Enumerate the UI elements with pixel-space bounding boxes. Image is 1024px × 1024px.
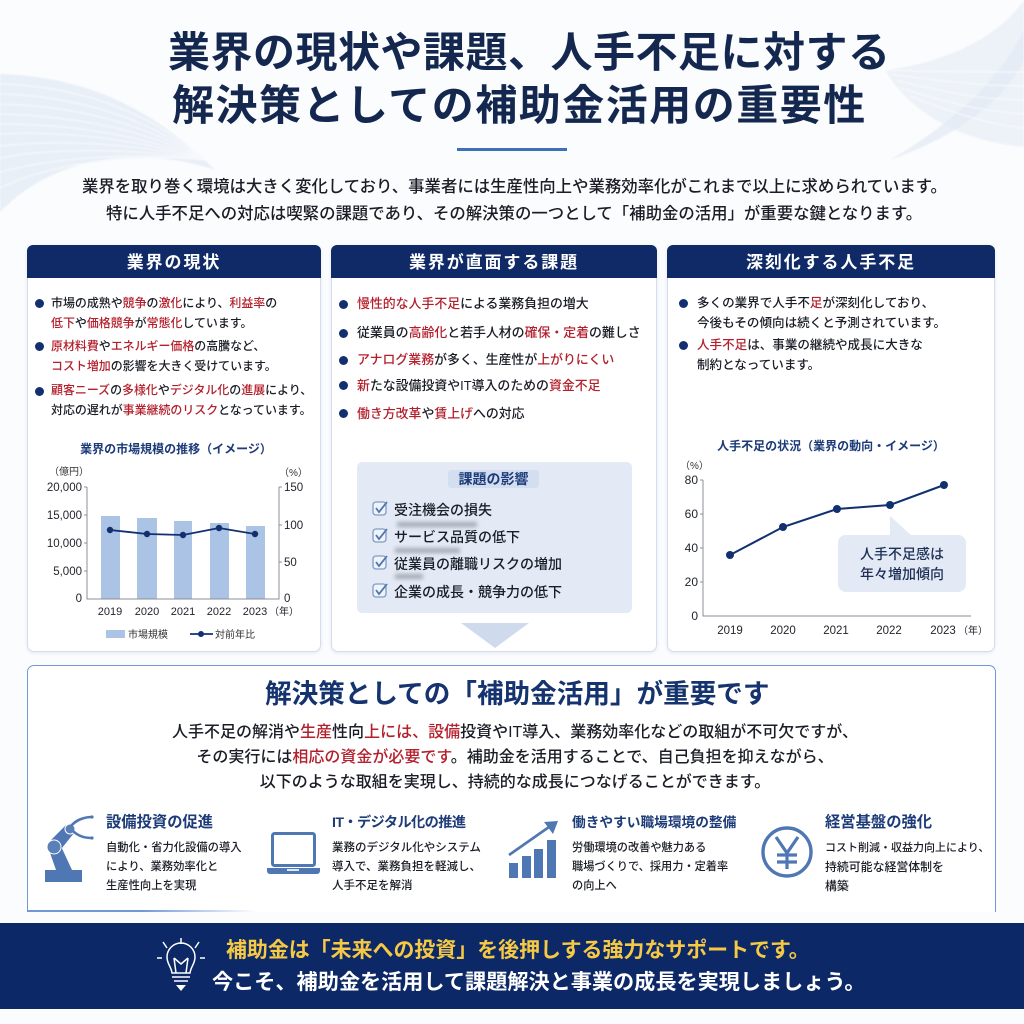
item text: コスト削減・収益力向上により、 xyxy=(825,842,989,854)
bullets: 深刻化する人手不足 xyxy=(679,296,946,372)
panel heading: 深刻化する人手不足 xyxy=(667,245,995,278)
item text: 持続可能な経営体制を xyxy=(825,860,944,874)
chart callout: 年々増加傾向 xyxy=(860,566,944,582)
solution text: 以下のような取組を実現し、持続的な成長につなげることができます。 xyxy=(260,774,770,791)
panel: 解決策 xyxy=(27,665,996,912)
bullets: 業界が直面する課題: 新たな設備投資やIT導入のための資金不足 xyxy=(357,378,600,393)
line chart: 人手不足の状況: 80 xyxy=(685,473,698,487)
checklist: 従業員の離職リスクの増加 xyxy=(394,556,562,572)
bar chart: 市場規模の推移: 15,000 xyxy=(47,510,82,522)
icon: light bulb xyxy=(157,938,205,991)
callout heading xyxy=(448,470,539,488)
item text: 職場づくりで、採用力・定着率 xyxy=(572,861,728,873)
arrow: down triangle xyxy=(461,623,529,648)
checklist: サービス品質の低下 xyxy=(394,529,520,545)
item: 働きやすい職場環境の整備 xyxy=(508,815,736,892)
bullets: 深刻化する人手不足: 今後もその傾向は続くと予測されています。 xyxy=(697,316,946,330)
item text: 導入で、業務負担を軽減し、 xyxy=(332,861,481,873)
chart callout: 人手不足感は xyxy=(860,546,944,562)
item text: 自動化・省力化設備の導入 xyxy=(106,842,242,854)
bar chart: 市場規模の推移: （億円） xyxy=(49,465,89,478)
bullets: 業界の現状: 低下や価格競争が常態化しています。 xyxy=(51,316,252,330)
item: IT・デジタル化の推進 xyxy=(267,814,481,892)
callout box: 課題の影響 xyxy=(357,462,632,613)
panel: 業界の現状 xyxy=(27,245,321,652)
item text xyxy=(825,814,989,893)
line chart: 人手不足の状況: （%） xyxy=(680,460,709,472)
item text: 生産性向上を実現 xyxy=(106,880,196,892)
panel: 深刻化する人手不足 xyxy=(667,245,995,652)
title: 業界の現状や課題、人手不足に対する xyxy=(168,29,891,76)
intro text: 業界を取り巻く環境は大きく変化しており、事業者には生産性向上や業務効率化がこれまで以上に求められています。 xyxy=(82,178,947,196)
bullets: 業界が直面する課題: 働き方改革や賃上げへの対応 xyxy=(357,406,525,421)
bullets: 深刻化する人手不足: 制約となっています。 xyxy=(697,358,820,372)
line chart: 人手不足の状況: 2022 xyxy=(876,625,902,637)
bar chart: 市場規模の推移: 10,000 xyxy=(47,538,82,550)
panel: 業界が直面する課題 xyxy=(331,245,657,652)
solution text: その実行には相応の資金が必要です。補助金を活用することで、自己負担を抑えながら、 xyxy=(196,749,834,766)
panel heading: 業界の現状: 業界の現状 xyxy=(127,253,221,272)
intro text xyxy=(82,178,947,223)
bullets: 業界が直面する課題: アナログ業務が多く、生産性が上がりにくい xyxy=(357,352,614,367)
bar chart: 市場規模の推移: 2021 xyxy=(171,606,195,618)
bullets: 業界が直面する課題: 従業員の高齢化と若手人材の確保・定着の難しさ xyxy=(357,325,641,340)
panel heading: 業界が直面する課題: 業界が直面する課題 xyxy=(409,253,579,272)
bullets: 業界が直面する課題 xyxy=(339,296,641,421)
chart legend: 対前年比 xyxy=(215,628,255,641)
bullets: 深刻化する人手不足: 多くの業界で人手不足が深刻化しており、 xyxy=(697,296,934,310)
bar chart: 市場規模の推移: 0 xyxy=(284,593,290,605)
title: 解決策としての補助金活用の重要性 xyxy=(172,82,867,129)
solution text: 人手不足の解消や生産性向上には、設備投資やIT導入、業務効率化などの取組が不可欠ですが、 xyxy=(172,724,858,741)
item: 経営基盤の強化 xyxy=(761,814,989,893)
icon: yen coin xyxy=(761,826,813,878)
item text: 人手不足を解消 xyxy=(332,880,412,892)
bar chart: 市場規模の推移: 2019 xyxy=(98,606,122,618)
item: 設備投資の促進 xyxy=(45,814,242,892)
item text: 構築 xyxy=(825,879,849,893)
bullets: 業界の現状: コスト増加の影響を大きく受けています。 xyxy=(51,358,277,372)
bar chart: 市場規模の推移: （年） xyxy=(269,605,299,618)
item text: 業務のデジタル化やシステム xyxy=(332,842,481,854)
title underline xyxy=(457,148,567,151)
bar chart: 市場規模の推移: 2020 xyxy=(135,606,159,618)
icon: laptop xyxy=(267,832,320,874)
banner xyxy=(0,923,1024,1009)
chart title: 業界の市場規模の推移（イメージ） xyxy=(80,441,272,456)
bar chart: 市場規模の推移: 0 xyxy=(76,593,82,605)
panel bottom edge xyxy=(26,910,256,912)
chart callout xyxy=(838,516,966,592)
icon: robot arm xyxy=(45,815,94,882)
background wave: top left xyxy=(0,74,213,211)
item text: IT・デジタル化の推進 xyxy=(332,815,465,831)
panel heading: 深刻化する人手不足: 深刻化する人手不足 xyxy=(746,253,916,272)
bar chart: 市場規模の推移: 5,000 xyxy=(53,566,82,578)
title xyxy=(168,29,891,129)
item text: 労働環境の改善や魅力ある xyxy=(572,842,706,854)
chart title: 人手不足の状況（業界の動向・イメージ） xyxy=(717,438,945,453)
bar chart: 市場規模の推移: 150 xyxy=(284,482,303,494)
item text: 働きやすい職場環境の整備 xyxy=(572,815,736,830)
item text: 経営基盤の強化 xyxy=(825,814,932,831)
bullets: 業界の現状: 顧客ニーズの多様化やデジタル化の進展により、 xyxy=(51,383,312,397)
background wave: top right xyxy=(886,2,1024,158)
line chart: 人手不足の状況: 0 xyxy=(691,609,698,623)
bar chart: 市場規模の推移: 100 xyxy=(284,520,303,532)
line chart: 人手不足の状況: 60 xyxy=(685,507,698,521)
chart legend xyxy=(106,628,255,641)
line chart: 人手不足の状況: 2021 xyxy=(823,625,849,637)
bar chart: 市場規模の推移: 2023 xyxy=(243,606,267,618)
bullets: 業界の現状: 市場の成熟や競争の激化により、利益率の xyxy=(51,296,277,310)
icon: growth chart xyxy=(508,821,558,878)
solution heading: 解決策としての「補助金活用」が重要です xyxy=(265,679,769,709)
checklist xyxy=(372,501,562,600)
bar chart: 市場規模の推移 xyxy=(47,441,308,641)
bullets: 業界の現状: 対応の遅れが事業継続のリスクとなっています。 xyxy=(51,402,312,416)
checklist: 受注機会の損失 xyxy=(394,502,492,518)
item text xyxy=(106,814,242,892)
checklist: 企業の成長・競争力の低下 xyxy=(394,584,562,600)
banner line 1: 補助金は「未来への投資」を後押しする強力なサポートです。 xyxy=(226,939,810,962)
item text xyxy=(332,814,481,892)
bar chart: 市場規模の推移: 50 xyxy=(284,557,297,569)
item text xyxy=(572,815,736,892)
line chart: 人手不足の状況: 2019 xyxy=(717,625,743,637)
banner line 2: 今こそ、補助金を活用して課題解決と事業の成長を実現しましょう。 xyxy=(212,971,865,994)
line chart: 人手不足の状況: 2020 xyxy=(770,625,796,637)
bullets: 業界が直面する課題: 慢性的な人手不足による業務負担の増大 xyxy=(357,296,589,311)
line chart: 人手不足の状況: 40 xyxy=(685,541,698,555)
line chart: 人手不足の状況: （年） xyxy=(958,624,988,637)
chart legend: 市場規模 xyxy=(128,628,168,641)
item text: の向上へ xyxy=(572,880,617,892)
line chart: 人手不足の状況: 20 xyxy=(685,575,698,589)
panel heading: 業界が直面する課題 xyxy=(331,245,657,278)
bar chart: 市場規模の推移: 2022 xyxy=(207,606,231,618)
panel heading: 業界の現状 xyxy=(27,245,321,278)
callout heading: 課題の影響 xyxy=(458,471,528,487)
line chart: 人手不足の状況: 2023 xyxy=(930,625,956,637)
solution text xyxy=(172,723,858,791)
intro text: 特に人手不足への対応は喫緊の課題であり、その解決策の一つとして「補助金の活用」が重要な鍵となります。 xyxy=(106,205,922,223)
bar chart: 市場規模の推移: （%） xyxy=(279,467,308,479)
bar chart: 市場規模の推移: 20,000 xyxy=(47,482,82,494)
bullets: 深刻化する人手不足: 人手不足は、事業の継続や成長に大きな xyxy=(697,338,923,352)
line chart: 人手不足の状況 xyxy=(680,438,988,637)
item text: 設備投資の促進 xyxy=(106,814,213,831)
bullets: 業界の現状 xyxy=(35,296,312,416)
item text: により、業務効率化と xyxy=(106,861,218,873)
bullets: 業界の現状: 原材料費やエネルギー価格の高騰など、 xyxy=(51,339,265,353)
